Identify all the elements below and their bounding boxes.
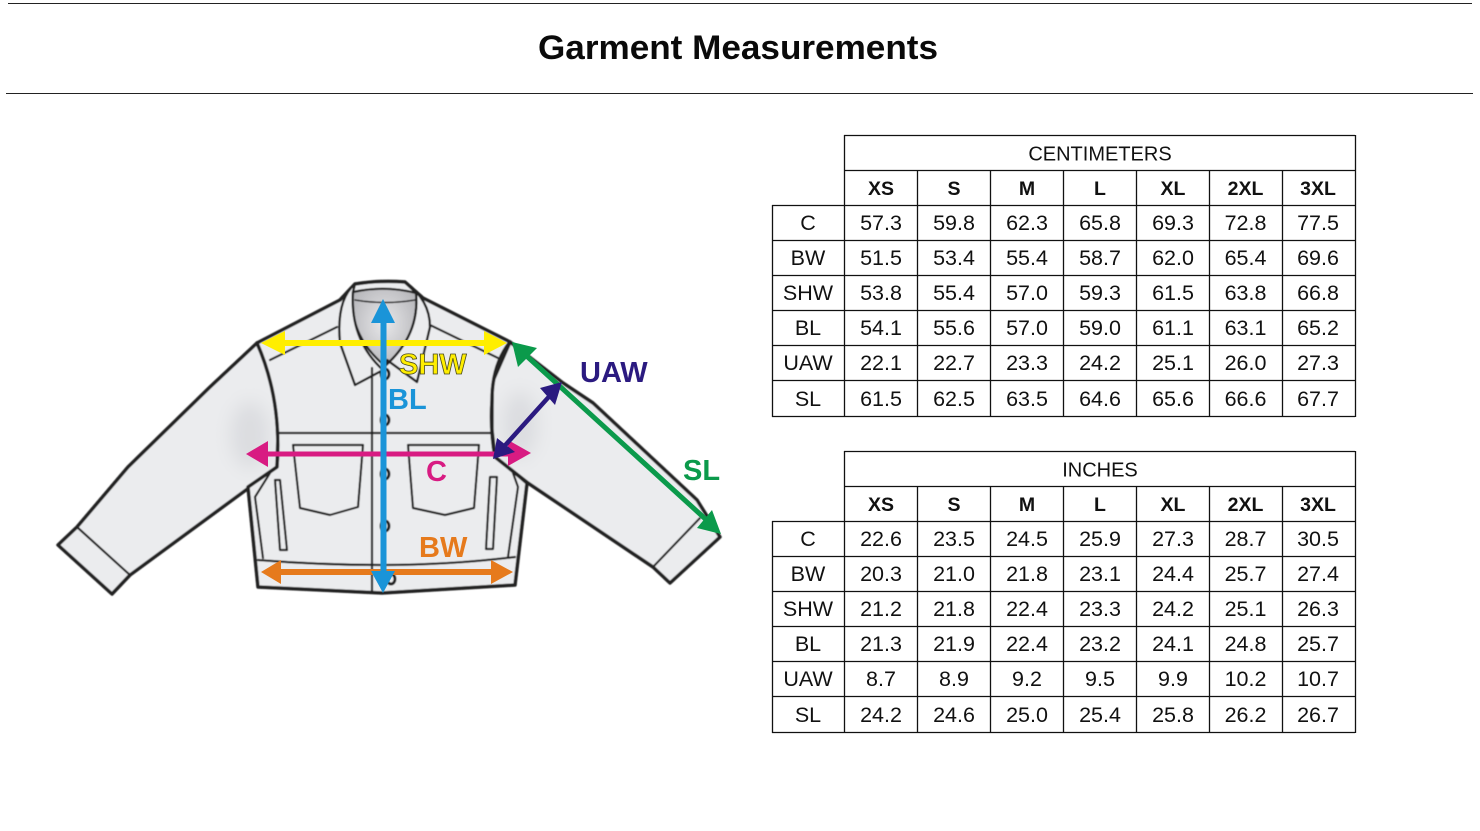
data rows: 61.5 (1152, 281, 1194, 305)
data rows: 62.5 (933, 387, 975, 411)
data rows (783, 527, 1339, 727)
data rows: 27.3 (1297, 351, 1339, 375)
data rows: SL (795, 703, 821, 727)
data rows: C (800, 211, 816, 235)
data rows: 9.2 (1012, 667, 1042, 691)
data rows: 24.8 (1225, 632, 1266, 656)
data rows: 23.3 (1006, 351, 1048, 375)
data rows: 26.2 (1225, 703, 1266, 727)
data rows: 66.8 (1297, 281, 1339, 305)
data rows: 51.5 (860, 246, 902, 270)
data rows: 55.6 (933, 316, 975, 340)
arrow: chest (246, 440, 531, 467)
data rows: 55.4 (933, 281, 975, 305)
arrow: sleeve length (512, 342, 721, 534)
data rows: 63.8 (1225, 281, 1266, 305)
data rows: 27.3 (1152, 527, 1194, 551)
data rows: 64.6 (1079, 387, 1121, 411)
data rows: 53.8 (860, 281, 902, 305)
size header row: S (947, 178, 961, 200)
data rows: 69.3 (1152, 211, 1194, 235)
data rows: BW (791, 562, 826, 586)
label: BL: BL (388, 384, 427, 416)
label: SHW: SHW (399, 349, 467, 381)
data rows: 63.5 (1006, 387, 1048, 411)
table: inches (772, 451, 1356, 733)
size header row: 2XL (1228, 494, 1263, 516)
data rows: 59.8 (933, 211, 975, 235)
data rows: 24.6 (933, 703, 975, 727)
data rows: 22.4 (1006, 632, 1048, 656)
data rows: SHW (783, 281, 834, 305)
size header row: S (947, 494, 961, 516)
data rows: 24.2 (1079, 351, 1121, 375)
data rows: 25.9 (1079, 527, 1121, 551)
data rows: 10.2 (1225, 667, 1266, 691)
size header row (868, 494, 1336, 516)
data rows: 77.5 (1297, 211, 1339, 235)
data rows: 69.6 (1297, 246, 1339, 270)
data rows: 25.8 (1152, 703, 1194, 727)
title: Garment Measurements (538, 29, 938, 67)
data rows: 26.0 (1225, 351, 1266, 375)
data rows: 67.7 (1297, 387, 1339, 411)
size header row: XS (868, 494, 894, 516)
data rows (783, 211, 1339, 411)
data rows: 26.3 (1297, 597, 1339, 621)
arrow: bottom width (261, 560, 513, 584)
data rows: 8.9 (939, 667, 969, 691)
label: C: C (426, 456, 447, 488)
data rows: 23.2 (1079, 632, 1121, 656)
data rows: 61.1 (1152, 316, 1194, 340)
data rows: 25.7 (1225, 562, 1266, 586)
data rows: 24.2 (1152, 597, 1194, 621)
data rows: 27.4 (1297, 562, 1339, 586)
size header row: L (1094, 178, 1106, 200)
data rows: 24.5 (1006, 527, 1048, 551)
data rows: BL (795, 632, 821, 656)
data rows: 21.2 (860, 597, 902, 621)
jacket illustration (58, 281, 720, 594)
data rows: BL (795, 316, 821, 340)
data rows: 30.5 (1297, 527, 1339, 551)
data rows: 21.0 (933, 562, 975, 586)
label: SL: SL (683, 455, 720, 487)
data rows: 22.1 (860, 351, 902, 375)
data rows: 66.6 (1225, 387, 1266, 411)
table heading: centimeters: CENTIMETERS (1028, 144, 1172, 166)
size header row: XL (1161, 178, 1186, 200)
data rows: 21.8 (1006, 562, 1048, 586)
size header row: 3XL (1300, 178, 1336, 200)
data rows: 72.8 (1225, 211, 1266, 235)
data rows: 22.7 (933, 351, 975, 375)
size header row: XL (1161, 494, 1186, 516)
size header row (868, 178, 1336, 200)
data rows: 22.6 (860, 527, 902, 551)
data rows: 55.4 (1006, 246, 1048, 270)
data rows: 62.3 (1006, 211, 1048, 235)
data rows: 20.3 (860, 562, 902, 586)
data rows: 26.7 (1297, 703, 1339, 727)
data rows: 25.0 (1006, 703, 1048, 727)
data rows: 65.2 (1297, 316, 1339, 340)
size header row: XS (868, 178, 894, 200)
data rows: UAW (783, 351, 833, 375)
data rows: 8.7 (866, 667, 896, 691)
size header row: M (1019, 178, 1035, 200)
size header row: L (1094, 494, 1106, 516)
data rows: 57.0 (1006, 281, 1048, 305)
data rows: BW (791, 246, 826, 270)
data rows: C (800, 527, 816, 551)
data rows: 24.2 (860, 703, 902, 727)
table heading: inches: INCHES (1062, 460, 1138, 482)
size header row: 2XL (1228, 178, 1263, 200)
data rows: 61.5 (860, 387, 902, 411)
label: BW: BW (419, 532, 468, 564)
data rows: 59.0 (1079, 316, 1121, 340)
data rows: 28.7 (1225, 527, 1266, 551)
data rows: 25.1 (1225, 597, 1266, 621)
data rows: 65.4 (1225, 246, 1266, 270)
data rows: 23.5 (933, 527, 975, 551)
arrow: body length (371, 299, 395, 593)
arrow: upper arm width (493, 382, 562, 459)
data rows: 25.1 (1152, 351, 1194, 375)
data rows: 59.3 (1079, 281, 1121, 305)
data rows: 21.3 (860, 632, 902, 656)
label: UAW: UAW (580, 357, 648, 389)
size header row: M (1019, 494, 1035, 516)
data rows: SHW (783, 597, 834, 621)
data rows: 58.7 (1079, 246, 1121, 270)
size header row: 3XL (1300, 494, 1336, 516)
data rows: 24.4 (1152, 562, 1194, 586)
data rows: 63.1 (1225, 316, 1266, 340)
data rows: 62.0 (1152, 246, 1194, 270)
data rows: 22.4 (1006, 597, 1048, 621)
data rows: 9.5 (1085, 667, 1115, 691)
data rows: 25.7 (1297, 632, 1339, 656)
data rows: 23.1 (1079, 562, 1121, 586)
data rows: 21.9 (933, 632, 975, 656)
data rows: 23.3 (1079, 597, 1121, 621)
data rows: 21.8 (933, 597, 975, 621)
data rows: 65.6 (1152, 387, 1194, 411)
table: centimeters (772, 135, 1356, 417)
data rows: 10.7 (1297, 667, 1339, 691)
data rows: 25.4 (1079, 703, 1121, 727)
data rows: 57.3 (860, 211, 902, 235)
data rows: UAW (783, 667, 833, 691)
data rows: 65.8 (1079, 211, 1121, 235)
data rows: SL (795, 387, 821, 411)
jacket diagram (58, 281, 721, 594)
data rows: 53.4 (933, 246, 975, 270)
data rows: 54.1 (860, 316, 902, 340)
data rows: 24.1 (1152, 632, 1194, 656)
data rows: 57.0 (1006, 316, 1048, 340)
arrow: shoulder width (261, 331, 507, 355)
data rows: 9.9 (1158, 667, 1188, 691)
